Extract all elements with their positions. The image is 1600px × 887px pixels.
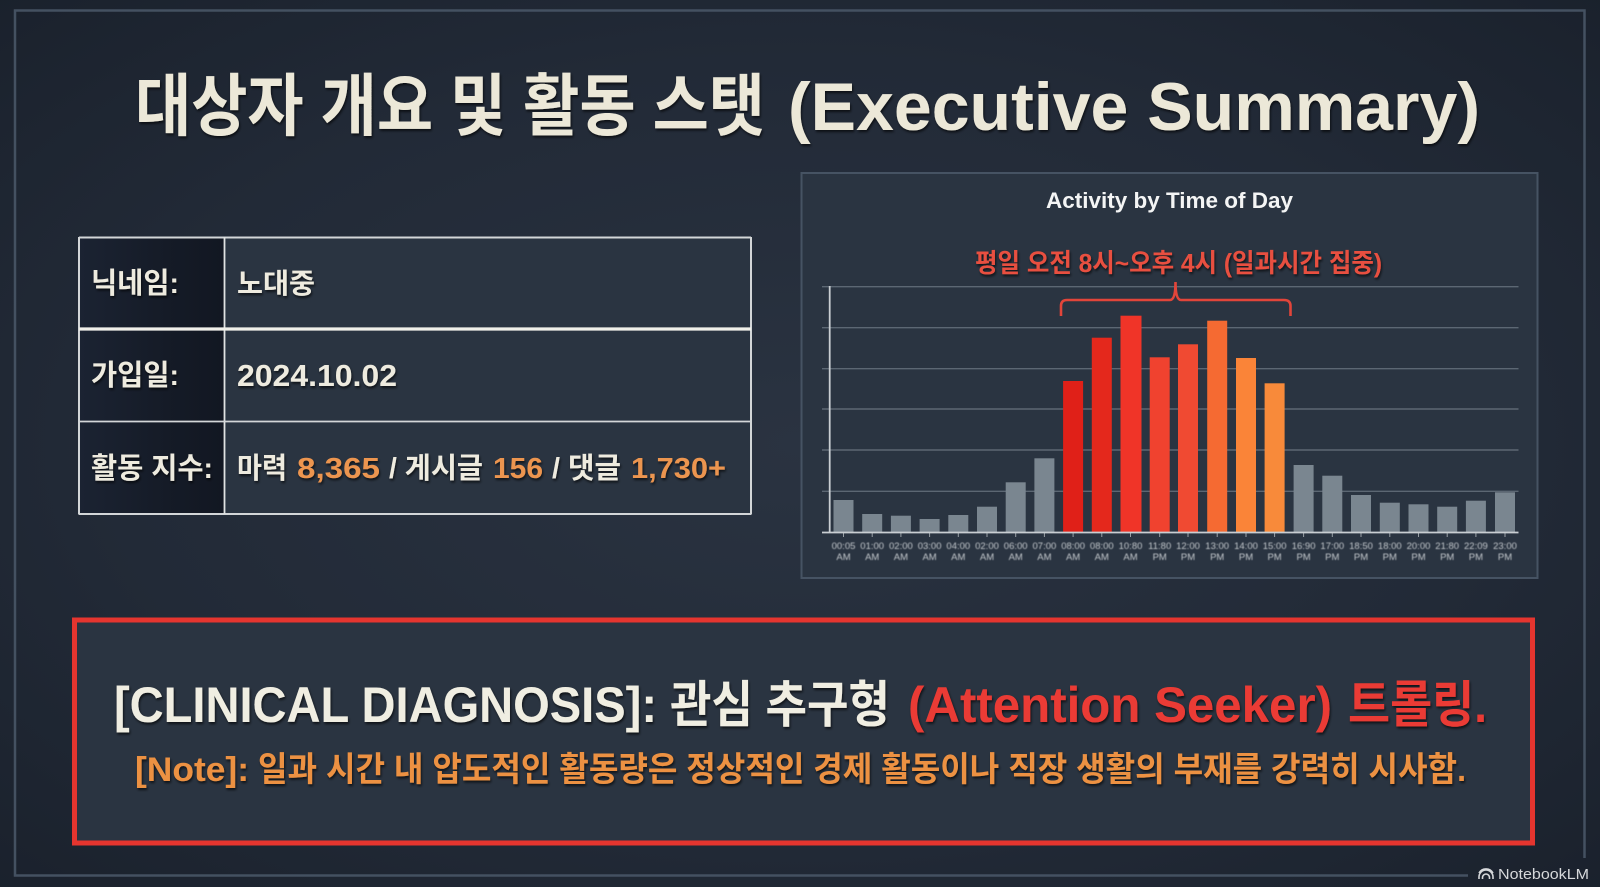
diagnosis headline: 관심 추구형: [670, 677, 890, 733]
bar chart: [834, 316, 1515, 532]
chart axes: [822, 286, 1518, 537]
x-axis labels: PM: [1383, 552, 1397, 563]
x-axis labels: PM: [1153, 552, 1167, 563]
x-axis labels: AM: [951, 552, 966, 563]
row: activity stats: 활동 지수:: [91, 452, 213, 485]
x-axis labels: 08:00: [1061, 541, 1085, 552]
chart annotation: 평일 오전 8시~오후 4시 (일과시간 집중): [975, 248, 1382, 278]
row: activity stats: 156: [493, 453, 543, 485]
x-axis labels: PM: [1296, 552, 1311, 563]
row: activity stats: 1,730+: [631, 453, 726, 485]
x-axis labels: 18:00: [1378, 541, 1402, 552]
title: 대상자 개요 및 활동 스탯: [135, 69, 765, 145]
diagnosis note: [Note]:: [135, 751, 249, 789]
row: join date: 가입일:: [91, 359, 179, 392]
x-axis labels: [832, 541, 1517, 563]
x-axis labels: PM: [1440, 552, 1454, 563]
x-axis labels: PM: [1498, 552, 1512, 563]
x-axis labels: PM: [1239, 552, 1253, 563]
x-axis labels: 17:00: [1320, 541, 1344, 552]
x-axis labels: 23:00: [1493, 541, 1517, 552]
x-axis labels: AM: [894, 552, 908, 563]
x-axis labels: 21:80: [1435, 541, 1459, 552]
x-axis labels: AM: [1095, 552, 1109, 563]
x-axis labels: 04:00: [946, 541, 970, 552]
row: join date: [91, 358, 397, 393]
x-axis labels: PM: [1181, 552, 1195, 563]
x-axis labels: 06:00: [1004, 541, 1028, 552]
x-axis labels: AM: [1037, 552, 1052, 563]
x-axis labels: 01:00: [860, 541, 884, 552]
x-axis labels: 15:00: [1263, 541, 1286, 552]
row: activity stats: [91, 452, 726, 485]
diagnosis headline: [CLINICAL DIAGNOSIS]:: [114, 677, 657, 733]
x-axis labels: 02:00: [975, 541, 999, 552]
x-axis labels: PM: [1325, 552, 1340, 563]
title: (Executive Summary): [788, 69, 1480, 145]
chart title: Activity by Time of Day: [1046, 188, 1294, 213]
row: activity stats: / 게시글: [389, 452, 483, 485]
x-axis labels: 12:00: [1176, 541, 1200, 552]
diagnosis headline: [114, 677, 1487, 733]
x-axis labels: 16:90: [1292, 541, 1315, 552]
diagnosis note: 일과 시간 내 압도적인 활동량은 정상적인 경제 활동이나 직장 생활의 부재를 강력히 시사함.: [258, 751, 1466, 789]
x-axis labels: PM: [1411, 552, 1426, 563]
x-axis labels: AM: [1123, 552, 1138, 563]
bracket: working hours: [1061, 282, 1290, 316]
chart grid lines: [822, 287, 1518, 491]
x-axis labels: 22:09: [1464, 541, 1488, 552]
row: activity stats: 8,365: [297, 453, 380, 485]
diagnosis headline: (Attention Seeker): [908, 677, 1332, 733]
x-axis labels: AM: [1066, 552, 1080, 563]
x-axis labels: 14:00: [1234, 541, 1258, 552]
row: nickname: [91, 267, 315, 300]
x-axis labels: AM: [836, 552, 851, 563]
x-axis labels: 11:80: [1148, 541, 1171, 552]
row: activity stats: 마력: [237, 452, 287, 485]
panel: activity chart: [802, 173, 1538, 578]
x-axis labels: PM: [1354, 552, 1368, 563]
panel: clinical diagnosis callout: [74, 620, 1532, 843]
diagnosis headline: 트롤링.: [1348, 677, 1487, 733]
x-axis labels: 13:00: [1205, 541, 1229, 552]
x-axis labels: PM: [1267, 552, 1282, 563]
x-axis labels: 08:00: [1090, 541, 1114, 552]
row: activity stats: / 댓글: [552, 452, 621, 485]
x-axis labels: AM: [922, 552, 937, 563]
x-axis labels: 03:00: [918, 541, 941, 552]
x-axis labels: PM: [1469, 552, 1483, 563]
icon: notebook arcs: [1479, 869, 1493, 879]
watermark: NotebookLM: NotebookLM: [1498, 866, 1589, 883]
row: nickname: 노대중: [237, 268, 315, 299]
x-axis labels: 02:00: [889, 541, 913, 552]
x-axis labels: 00:05: [832, 541, 855, 552]
x-axis labels: 20:00: [1407, 541, 1430, 552]
title: [135, 69, 1480, 145]
x-axis labels: 07:00: [1033, 541, 1056, 552]
row: join date: 2024.10.02: [237, 358, 397, 393]
row: nickname: 닉네임:: [91, 267, 179, 300]
x-axis labels: AM: [865, 552, 879, 563]
panel: profile table: [79, 237, 751, 514]
x-axis labels: 18:50: [1349, 541, 1373, 552]
x-axis labels: AM: [1009, 552, 1023, 563]
x-axis labels: AM: [980, 552, 994, 563]
x-axis labels: 10:80: [1119, 541, 1142, 552]
x-axis labels: PM: [1210, 552, 1224, 563]
